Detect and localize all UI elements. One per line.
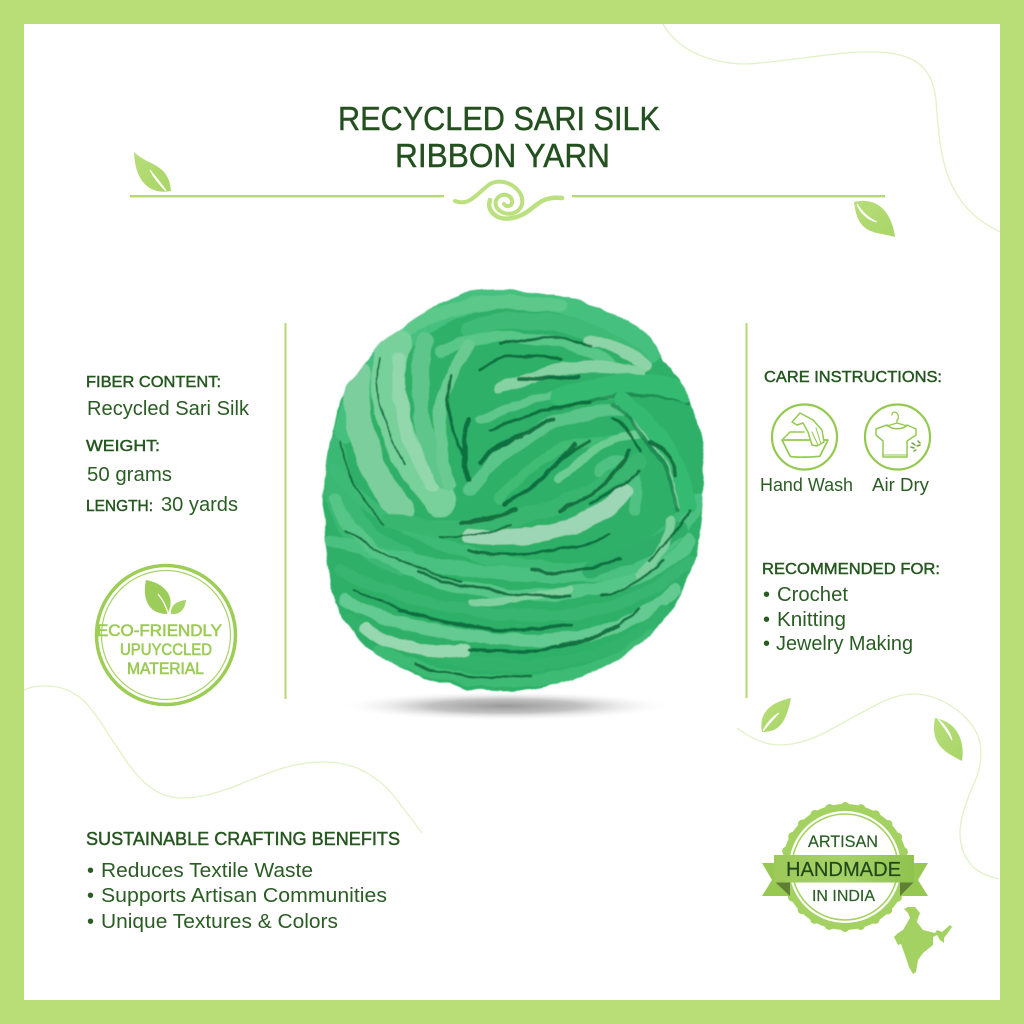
icon: leaf top right	[854, 201, 895, 237]
artisan handmade seal: ARTISAN	[808, 832, 878, 851]
scalloped ring	[782, 804, 908, 930]
sari silk yarn ball	[321, 288, 705, 693]
vertical divider left	[284, 323, 286, 699]
specifications text block: FIBER CONTENT:	[86, 374, 221, 391]
benefits text block: •	[87, 885, 94, 907]
icon: leaf top left	[134, 152, 171, 192]
care instructions panel: CARE INSTRUCTIONS:	[764, 369, 942, 386]
benefits text block: •	[87, 911, 94, 933]
crevice shadows	[340, 338, 690, 677]
decorative curve: bottom left	[24, 686, 422, 833]
benefits text block: Supports Artisan Communities	[101, 885, 387, 907]
eco-friendly badge: MATERIAL	[127, 660, 204, 678]
artisan handmade seal	[762, 804, 928, 930]
icon: air dry t-shirt	[865, 404, 930, 470]
benefits text block: •	[87, 860, 94, 882]
benefits text block: Reduces Textile Waste	[101, 860, 313, 882]
recommended for panel: •	[763, 584, 770, 606]
icon: swirl ornament	[455, 182, 562, 219]
specifications text block: 50 grams	[87, 464, 172, 486]
ribbon tails	[762, 863, 928, 896]
icon: india map	[894, 907, 952, 974]
title: RECYCLED SARI SILK	[338, 101, 660, 138]
title	[338, 101, 660, 175]
specifications text block	[86, 374, 250, 516]
specifications text block: LENGTH:	[86, 498, 153, 515]
recommended for panel	[762, 561, 940, 655]
care instructions panel	[760, 369, 942, 495]
icon: hand wash	[772, 404, 837, 470]
yarn shadow	[337, 691, 673, 721]
specifications text block: Recycled Sari Silk	[87, 398, 250, 420]
icon: leaf lower right one	[761, 698, 791, 732]
recommended for panel: •	[763, 609, 770, 631]
title: RIBBON YARN	[395, 138, 610, 175]
eco-friendly badge: UPUYCCLED	[120, 641, 212, 659]
icon: twin leaves	[145, 580, 186, 614]
specifications text block: 30 yards	[161, 494, 238, 516]
icon: leaf lower right two	[934, 718, 963, 761]
eco-friendly badge: ECO-FRIENDLY	[97, 622, 222, 640]
artisan handmade seal: HANDMADE	[786, 859, 901, 881]
care instructions panel: Air Dry	[872, 475, 929, 495]
benefits text block: Unique Textures & Colors	[101, 911, 338, 933]
recommended for panel: Crochet	[777, 584, 848, 606]
benefits text block	[86, 829, 400, 933]
artisan handmade seal: IN INDIA	[812, 888, 875, 905]
ribbon banner	[774, 855, 914, 882]
care instructions panel: Hand Wash	[760, 475, 853, 495]
header divider with swirl	[130, 182, 885, 219]
recommended for panel: Knitting	[777, 609, 846, 631]
vertical divider right	[746, 323, 748, 698]
decorative curve: top right	[663, 24, 1000, 232]
benefits text block: SUSTAINABLE CRAFTING BENEFITS	[86, 829, 400, 849]
eco-friendly badge	[96, 566, 236, 704]
recommended for panel: •	[763, 633, 770, 655]
decorative curve: bottom right	[737, 694, 999, 879]
recommended for panel: Jewelry Making	[776, 633, 913, 655]
recommended for panel: RECOMMENDED FOR:	[762, 561, 940, 578]
specifications text block: WEIGHT:	[86, 438, 160, 455]
